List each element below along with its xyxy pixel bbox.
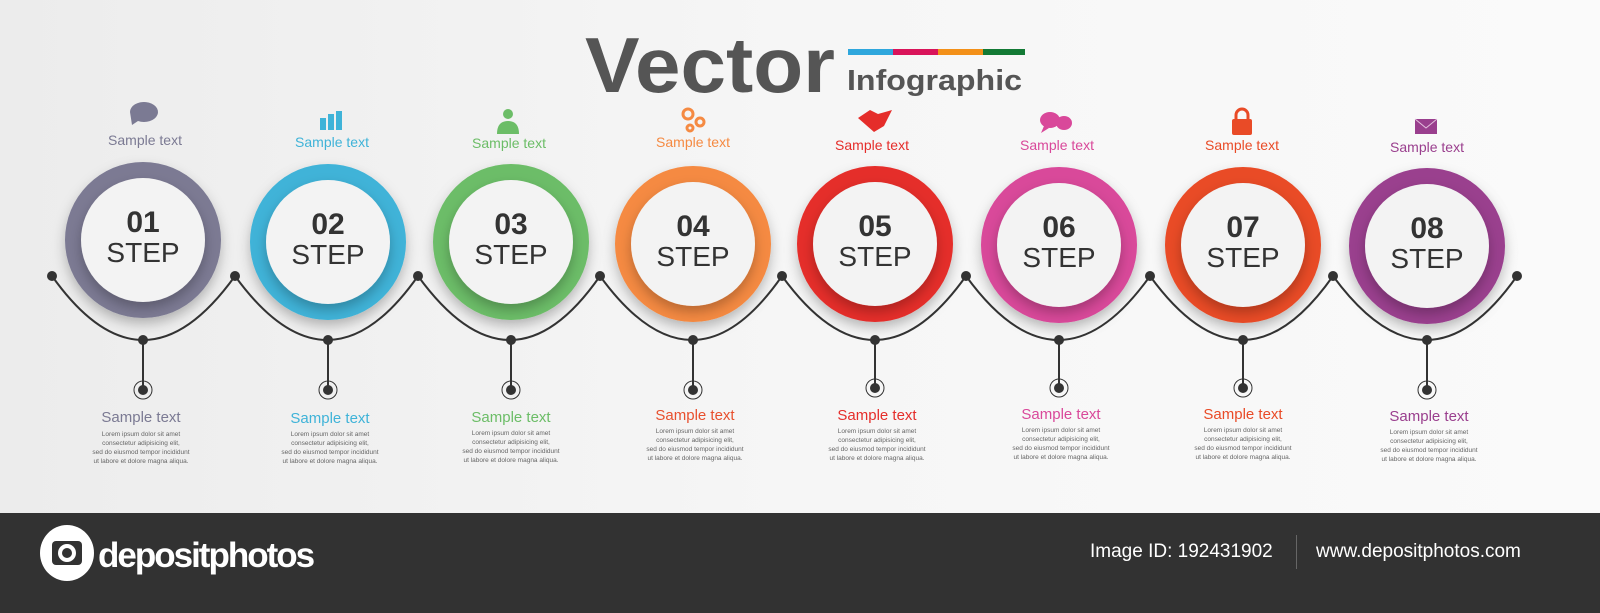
- step 6: Sample text: [1020, 137, 1094, 153]
- step 6: Sample text: [1021, 406, 1101, 423]
- step 3: STEP: [474, 239, 548, 270]
- step 1: STEP: [106, 237, 180, 268]
- step 1: ut labore et dolore magna aliqua.: [93, 458, 189, 465]
- step 7: 07: [1226, 211, 1260, 244]
- step 5: sed do eiusmod tempor incididunt: [828, 446, 926, 453]
- step 4: Sample text: [655, 407, 735, 424]
- step 3: Lorem ipsum dolor sit amet: [472, 430, 550, 437]
- step 6: sed do eiusmod tempor incididunt: [1012, 445, 1110, 452]
- step 6: consectetur adipisicing elit,: [1022, 436, 1100, 443]
- step 8: ut labore et dolore magna aliqua.: [1381, 456, 1477, 463]
- step 1: Lorem ipsum dolor sit amet: [102, 431, 180, 438]
- step 3: Sample text: [471, 409, 551, 426]
- step 8: [1349, 119, 1505, 463]
- step 2: sed do eiusmod tempor incididunt: [281, 449, 379, 456]
- step 4: ut labore et dolore magna aliqua.: [647, 455, 743, 462]
- step 3: consectetur adipisicing elit,: [472, 439, 550, 446]
- step 6: Lorem ipsum dolor sit amet: [1022, 427, 1100, 434]
- step 7: Sample text: [1203, 406, 1283, 423]
- connector line: [52, 276, 1517, 340]
- step 8: consectetur adipisicing elit,: [1390, 438, 1468, 445]
- logo: [40, 525, 314, 581]
- step 2: ut labore et dolore magna aliqua.: [282, 458, 378, 465]
- step 3: Sample text: [472, 135, 546, 151]
- step 4: [615, 109, 771, 462]
- step 1: consectetur adipisicing elit,: [102, 440, 180, 447]
- website: www.depositphotos.com: [1316, 541, 1521, 562]
- connector dots: [47, 271, 1522, 281]
- step 6: [981, 112, 1137, 461]
- step 1: 01: [126, 206, 160, 239]
- step 1: Sample text: [101, 409, 181, 426]
- step 2: consectetur adipisicing elit,: [291, 440, 369, 447]
- step 3: 03: [494, 208, 528, 241]
- step 6: 06: [1042, 211, 1076, 244]
- step 8: Sample text: [1389, 408, 1469, 425]
- step 3: sed do eiusmod tempor incididunt: [462, 448, 560, 455]
- step 7: ut labore et dolore magna aliqua.: [1195, 454, 1291, 461]
- step 4: Lorem ipsum dolor sit amet: [656, 428, 734, 435]
- step 3: ut labore et dolore magna aliqua.: [463, 457, 559, 464]
- step 4: STEP: [656, 241, 730, 272]
- step 7: STEP: [1206, 242, 1280, 273]
- step 4: Sample text: [656, 134, 730, 150]
- step 1: [65, 102, 221, 465]
- step 4: 04: [676, 210, 710, 243]
- step 2: 02: [311, 208, 345, 241]
- title: Infographic: [847, 65, 1022, 97]
- step 5: STEP: [838, 241, 912, 272]
- step 8: sed do eiusmod tempor incididunt: [1380, 447, 1478, 454]
- step 5: Sample text: [835, 137, 909, 153]
- step 5: Lorem ipsum dolor sit amet: [838, 428, 916, 435]
- step 7: [1165, 109, 1321, 461]
- step 5: [797, 110, 953, 462]
- step 2: Sample text: [290, 410, 370, 427]
- step 8: 08: [1410, 212, 1444, 245]
- step 3: [433, 109, 589, 464]
- step 1: sed do eiusmod tempor incididunt: [92, 449, 190, 456]
- title: Vector: [585, 21, 835, 109]
- logo: depositphotos: [98, 536, 313, 575]
- step 5: Sample text: [837, 407, 917, 424]
- step 2: [250, 111, 406, 465]
- step 5: consectetur adipisicing elit,: [838, 437, 916, 444]
- step 5: 05: [858, 210, 892, 243]
- step 1: Sample text: [108, 132, 182, 148]
- step 8: Sample text: [1390, 139, 1464, 155]
- step 2: Sample text: [295, 134, 369, 150]
- step 7: Lorem ipsum dolor sit amet: [1204, 427, 1282, 434]
- step 7: consectetur adipisicing elit,: [1204, 436, 1282, 443]
- step 4: consectetur adipisicing elit,: [656, 437, 734, 444]
- step 2: STEP: [291, 239, 365, 270]
- icon: camera: [40, 525, 94, 581]
- step 7: sed do eiusmod tempor incididunt: [1194, 445, 1292, 452]
- step 8: STEP: [1390, 243, 1464, 274]
- footer bar: [0, 513, 1600, 613]
- step 8: Lorem ipsum dolor sit amet: [1390, 429, 1468, 436]
- title: [585, 21, 1025, 109]
- step 6: STEP: [1022, 242, 1096, 273]
- step 4: sed do eiusmod tempor incididunt: [646, 446, 744, 453]
- step 5: ut labore et dolore magna aliqua.: [829, 455, 925, 462]
- image id: Image ID: 192431902: [1090, 541, 1273, 562]
- step 7: Sample text: [1205, 137, 1279, 153]
- step 2: Lorem ipsum dolor sit amet: [291, 431, 369, 438]
- step 6: ut labore et dolore magna aliqua.: [1013, 454, 1109, 461]
